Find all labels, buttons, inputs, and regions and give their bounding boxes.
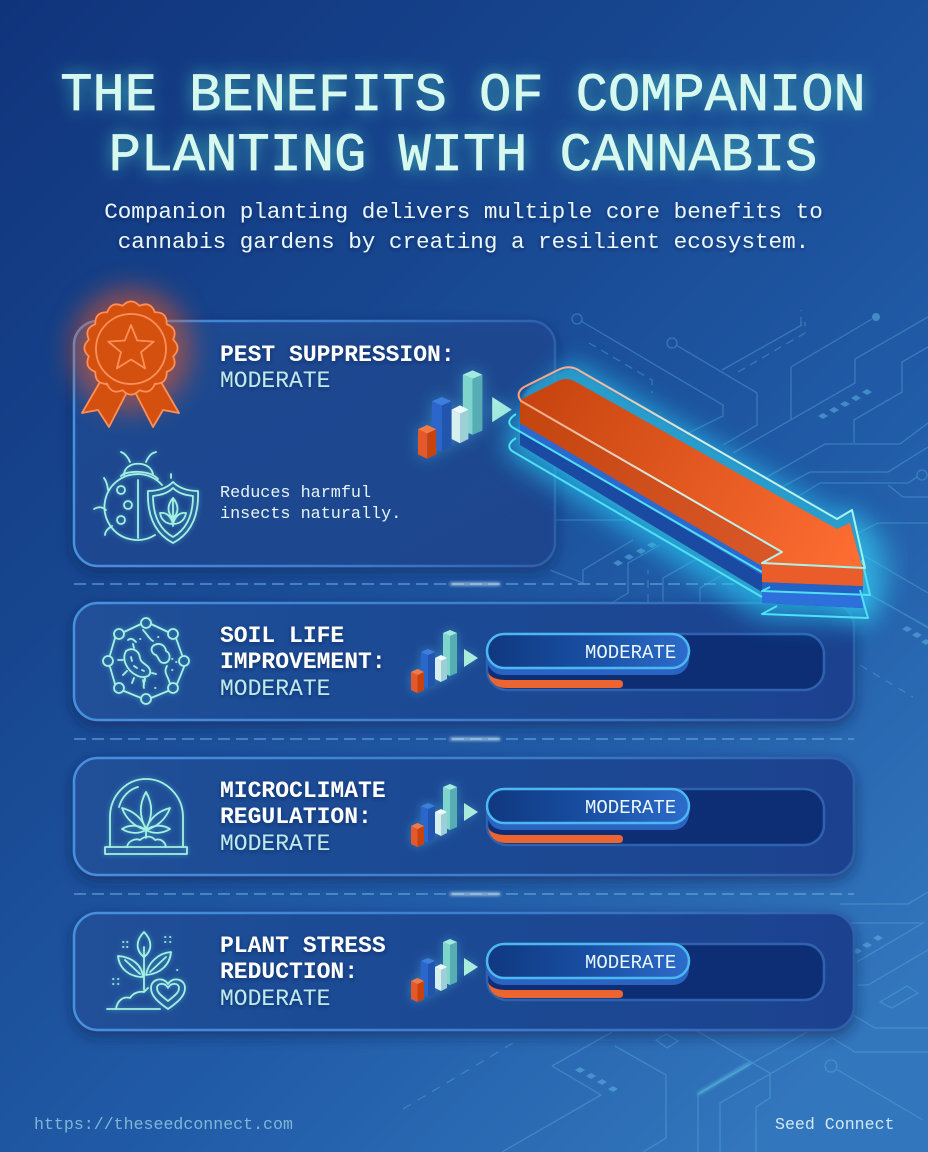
meter: moderate: MODERATE: [585, 952, 676, 974]
heading: pest suppression: PEST SUPPRESSION:: [220, 342, 455, 368]
arrow orange top face: [520, 379, 862, 567]
icon: ladybug with shield: [94, 452, 198, 543]
subtitle: cannabis gardens by creating a resilient ecosystem.: [118, 229, 809, 255]
panel: plant stress reduction: [74, 913, 854, 1030]
rating: moderate: MODERATE: [220, 831, 330, 857]
arrow top outline: [519, 367, 865, 568]
title: [60, 66, 866, 187]
heading: soil life improvement: SOIL LIFE: [220, 623, 344, 649]
icon: bar chart: [411, 784, 478, 847]
rating: moderate: MODERATE: [220, 676, 330, 702]
panel: soil life improvement: [74, 603, 854, 720]
panel: microclimate regulation: [74, 758, 854, 875]
icon: orange award medal: [71, 288, 191, 427]
title: PLANTING WITH CANNABIS: [109, 126, 817, 187]
rating: moderate: MODERATE: [220, 368, 330, 394]
icon: soil microbes: [103, 618, 189, 704]
arrow: large orange layered arrow: [508, 362, 890, 622]
heading: soil life improvement: IMPROVEMENT:: [220, 649, 386, 675]
footer url: https://theseedconnect.com: [34, 1115, 293, 1134]
subtitle: [104, 199, 823, 255]
meter: moderate: [487, 789, 824, 845]
arrow orange side face: [520, 400, 863, 586]
description: insects naturally.: [220, 505, 401, 524]
meter: moderate: MODERATE: [585, 642, 676, 664]
icon: sprout with heart: [107, 932, 185, 1009]
heading: plant stress reduction: REDUCTION:: [220, 959, 358, 985]
heading: microclimate regulation: REGULATION:: [220, 804, 372, 830]
panel: pest suppression: [71, 288, 555, 566]
icon: cannabis under dome: [105, 779, 187, 854]
title: THE BENEFITS OF COMPANION: [60, 66, 866, 127]
icon: bar chart: [411, 630, 478, 693]
heading: microclimate regulation: MICROCLIMATE: [220, 778, 386, 804]
meter: moderate: MODERATE: [585, 797, 676, 819]
subtitle: Companion planting delivers multiple core benefits to: [104, 199, 823, 225]
icon: bar chart: [411, 939, 478, 1002]
meter: moderate: [487, 944, 824, 1000]
rating: moderate: MODERATE: [220, 986, 330, 1012]
icon: bar chart: [418, 370, 512, 459]
description: Reduces harmful: [220, 484, 371, 503]
arrow lower outlines: [509, 414, 870, 618]
footer brand: Seed Connect: [775, 1115, 894, 1134]
meter: moderate: [487, 634, 824, 690]
heading: plant stress reduction: PLANT STRESS: [220, 933, 386, 959]
arrow bottom layer: [520, 423, 862, 608]
circuit pattern background: [385, 310, 928, 1152]
